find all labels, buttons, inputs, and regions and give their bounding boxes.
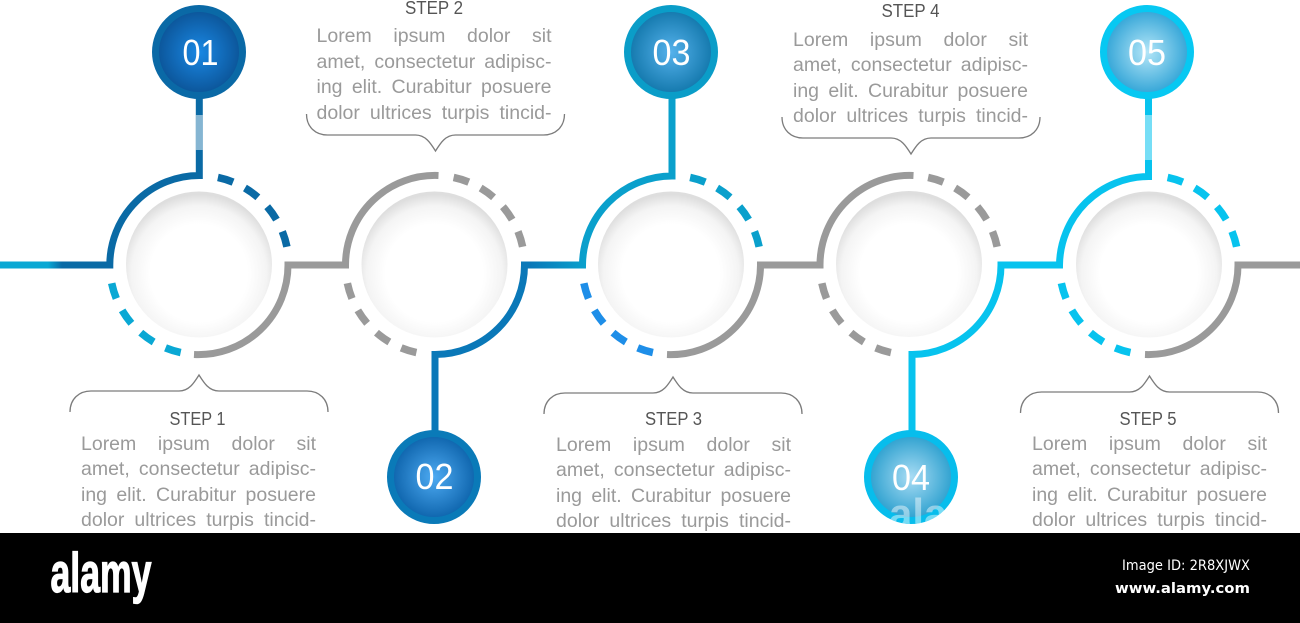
connector: grey link from step 3 to step 4 (667, 175, 914, 355)
text block: step 2: Lorem ipsum dolor sit (316, 25, 552, 47)
connector: grey exit line (1145, 265, 1300, 355)
text block: step 2: amet, consectetur adipisc- (316, 50, 552, 72)
badge 01: 01 (182, 32, 218, 73)
connector: grey link from step 1 to step 2 (194, 175, 438, 355)
heading: step 3: STEP 3 (645, 409, 702, 429)
connector: lead line and step 1 stem (0, 60, 199, 265)
brace: step 2 (306, 114, 564, 151)
text block: step 3: amet, consectetur adipisc- (556, 459, 791, 481)
text block: step 5: dolor ultrices turpis tincid- (1032, 509, 1267, 531)
text block: step 2: ing elit. Curabitur posuere (316, 76, 552, 98)
dashes: step 3 (565, 159, 778, 371)
badge 03: 03 (652, 32, 690, 73)
badge 04 (868, 434, 954, 537)
text block: step 3: ing elit. Curabitur posuere (556, 484, 791, 506)
brace: step 1 (70, 375, 328, 412)
badge 04: 04 (892, 457, 930, 498)
text block: step 4: dolor ultrices turpis tincid- (793, 105, 1028, 127)
badge 01 (156, 8, 242, 96)
text block: step 4: amet, consectetur adipisc- (793, 54, 1028, 76)
badge 03 (628, 8, 714, 96)
text block: step 5 (1032, 432, 1267, 531)
dashes: step 1 (93, 159, 305, 371)
text block: step 5: amet, consectetur adipisc- (1032, 458, 1267, 480)
text block: step 3: dolor ultrices turpis tincid- (556, 510, 791, 532)
brace: step 5 (1020, 376, 1278, 413)
white discs (126, 191, 1222, 338)
text block: step 3: Lorem ipsum dolor sit (556, 434, 791, 456)
badge 05: 05 (1128, 32, 1166, 73)
heading: step 1: STEP 1 (170, 409, 226, 429)
text block: step 2 (316, 25, 552, 124)
text block: step 3 (556, 434, 791, 532)
watermark patch on stem 5 (1145, 115, 1152, 160)
text block: step 4 (793, 28, 1028, 127)
connector: step 2 stem to step 3 stem (435, 60, 672, 470)
heading: step 4: STEP 4 (882, 1, 940, 21)
text block: step 4: Lorem ipsum dolor sit (793, 28, 1028, 50)
text block: step 1: dolor ultrices turpis tincid- (81, 509, 316, 531)
badge 02 (390, 434, 478, 520)
footer image id: Image ID: 2R8XJWX (1122, 558, 1250, 574)
text block: step 5: Lorem ipsum dolor sit (1032, 432, 1267, 454)
text block: step 1: Lorem ipsum dolor sit (81, 432, 316, 454)
text block: step 2: dolor ultrices turpis tincid- (316, 102, 552, 124)
badge 05 (1104, 8, 1190, 96)
footer logo: alamy (50, 541, 152, 604)
brace: step 3 (544, 377, 802, 414)
text block: step 5: ing elit. Curabitur posuere (1032, 484, 1267, 506)
footer band (0, 533, 1300, 623)
badge 02: 02 (416, 456, 454, 497)
text block: step 1: amet, consectetur adipisc- (81, 458, 316, 480)
text block: step 1: ing elit. Curabitur posuere (81, 484, 316, 506)
text block: step 1 (81, 432, 316, 531)
dashes: step 5 (1043, 159, 1255, 371)
connector: step 4 stem to step 5 stem (912, 60, 1148, 470)
heading: step 5: STEP 5 (1120, 409, 1176, 429)
dashes: step 2 (329, 159, 541, 371)
footer url: www.alamy.com (1115, 581, 1250, 597)
text block: step 4: ing elit. Curabitur posuere (793, 80, 1028, 102)
dashes: step 4 (803, 159, 1016, 371)
brace: step 4 (782, 117, 1040, 154)
badge 04: ala (889, 490, 948, 537)
watermark patch on stem 1 (196, 115, 203, 150)
